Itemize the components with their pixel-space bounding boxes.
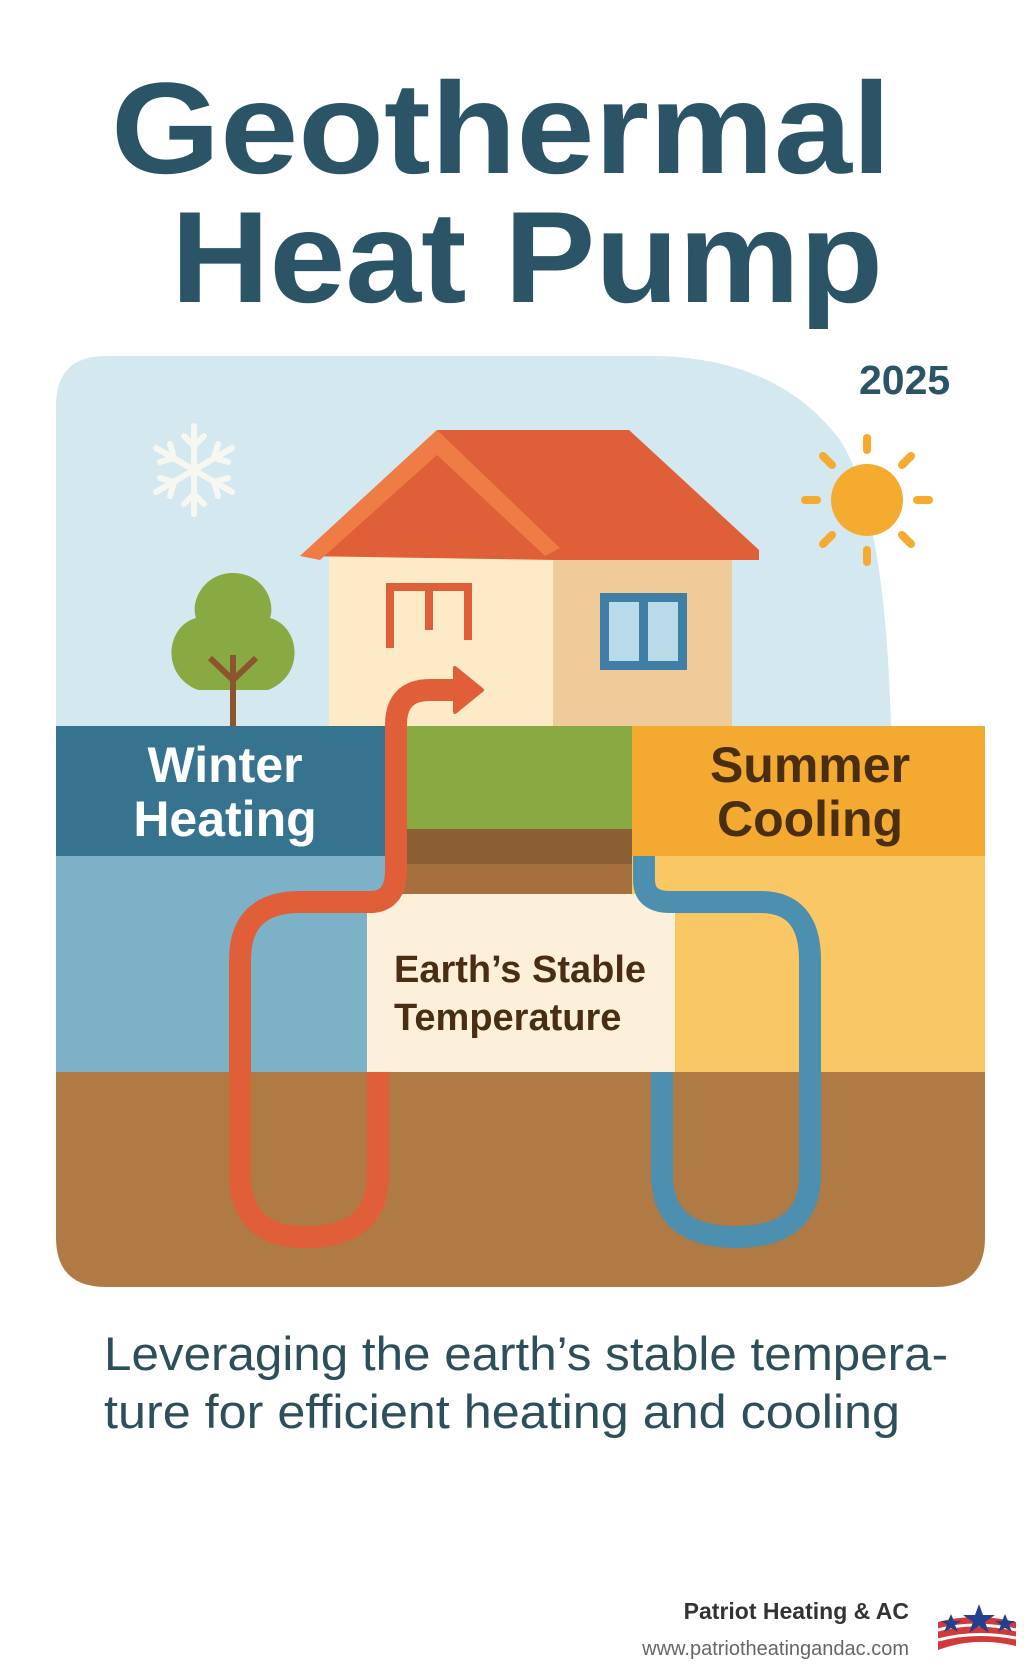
band: grass and soil strip [386, 726, 632, 894]
pipe: cooling loop [644, 856, 810, 1237]
sky [56, 356, 891, 726]
scene panel [56, 356, 985, 1287]
footer brand: www.patriotheatingandac.com [641, 1638, 909, 1660]
band: winter heating: Heating [133, 791, 317, 847]
icon: snowflake [156, 426, 232, 514]
window [600, 593, 687, 670]
pipe: heating loop with arrow [240, 668, 482, 1237]
earth's stable temperature label: Earth’s Stable [394, 949, 646, 991]
icon: house [300, 430, 759, 726]
band: summer cooling: Summer [710, 737, 910, 793]
band: winter heating [56, 726, 386, 856]
subtitle [104, 1327, 948, 1438]
ground layers [56, 856, 386, 1072]
icon: tree [171, 573, 295, 726]
band: summer cooling [632, 726, 985, 856]
footer brand [641, 1598, 909, 1660]
title: Heat Pump [171, 184, 883, 330]
earth's stable temperature label [394, 949, 646, 1039]
icon: flag logo [938, 1604, 1016, 1650]
subtitle: ture for efficient heating and cooling [104, 1385, 900, 1438]
icon: sun [805, 438, 929, 562]
indoor heat outlet [390, 587, 468, 648]
subtitle: Leveraging the earth’s stable tempera- [104, 1327, 948, 1380]
band: winter heating: Winter [147, 737, 303, 793]
earth's stable temperature label: Temperature [394, 997, 621, 1039]
footer brand: Patriot Heating & AC [684, 1598, 909, 1624]
title [111, 55, 891, 330]
title: Geothermal [111, 55, 891, 201]
band: summer cooling: Cooling [717, 791, 903, 847]
year label: 2025 [859, 357, 950, 403]
